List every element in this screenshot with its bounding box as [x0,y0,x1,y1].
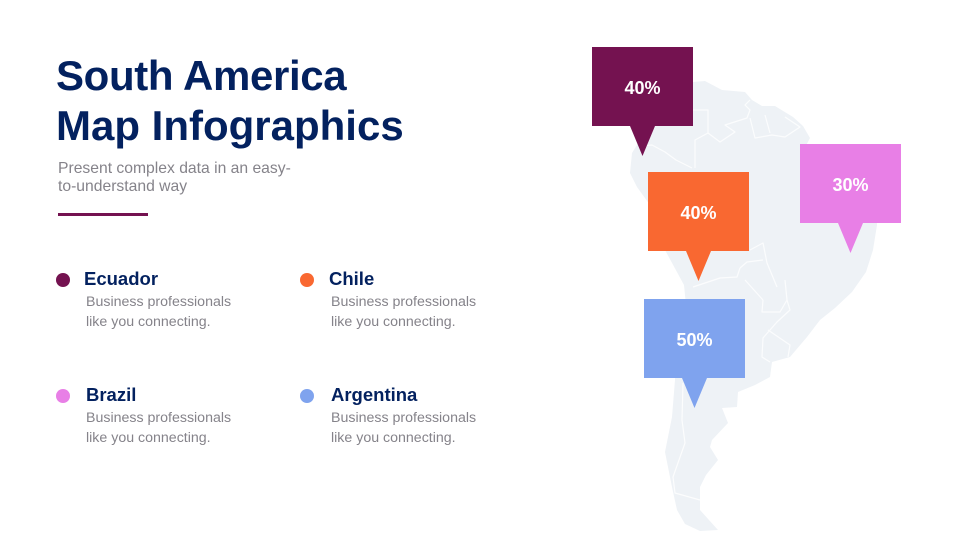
description: like you connecting. [86,430,211,446]
callout: Ecuador 40% [592,47,693,156]
description [86,294,231,330]
map: South America [630,81,877,531]
description [331,294,476,330]
name: Ecuador [84,268,158,289]
legend item: Chile [300,268,476,330]
description: Business professionals [331,294,476,310]
subtitle: Present complex data in an easy- [58,160,291,177]
name: Brazil [86,384,136,405]
dot [300,389,314,403]
dot [56,389,70,403]
title: South America [56,52,346,99]
callout: Argentina 50% [644,299,745,408]
dot [300,273,314,287]
callout: Ecuador 40%: 40% [624,78,661,98]
divider [58,213,148,216]
dot [56,273,70,287]
description: Business professionals [331,410,476,426]
description: like you connecting. [331,314,456,330]
title [56,52,404,149]
name: Chile [329,268,374,289]
description: Business professionals [86,294,231,310]
subtitle [58,160,291,195]
title: Map Infographics [56,102,404,149]
description [86,410,231,446]
name: Argentina [331,384,417,405]
callout: Brazil 30%: 30% [832,175,869,195]
callout: Chile 40%: 40% [680,203,717,223]
description: like you connecting. [86,314,211,330]
description: Business professionals [86,410,231,426]
subtitle: to-understand way [58,178,187,195]
description: like you connecting. [331,430,456,446]
legend item: Argentina [300,384,476,446]
callout: Chile 40% [648,172,749,281]
description [331,410,476,446]
legend item: Ecuador [56,268,231,330]
callout: Brazil 30% [800,144,901,253]
callout: Argentina 50%: 50% [676,330,713,350]
legend item: Brazil [56,384,231,446]
